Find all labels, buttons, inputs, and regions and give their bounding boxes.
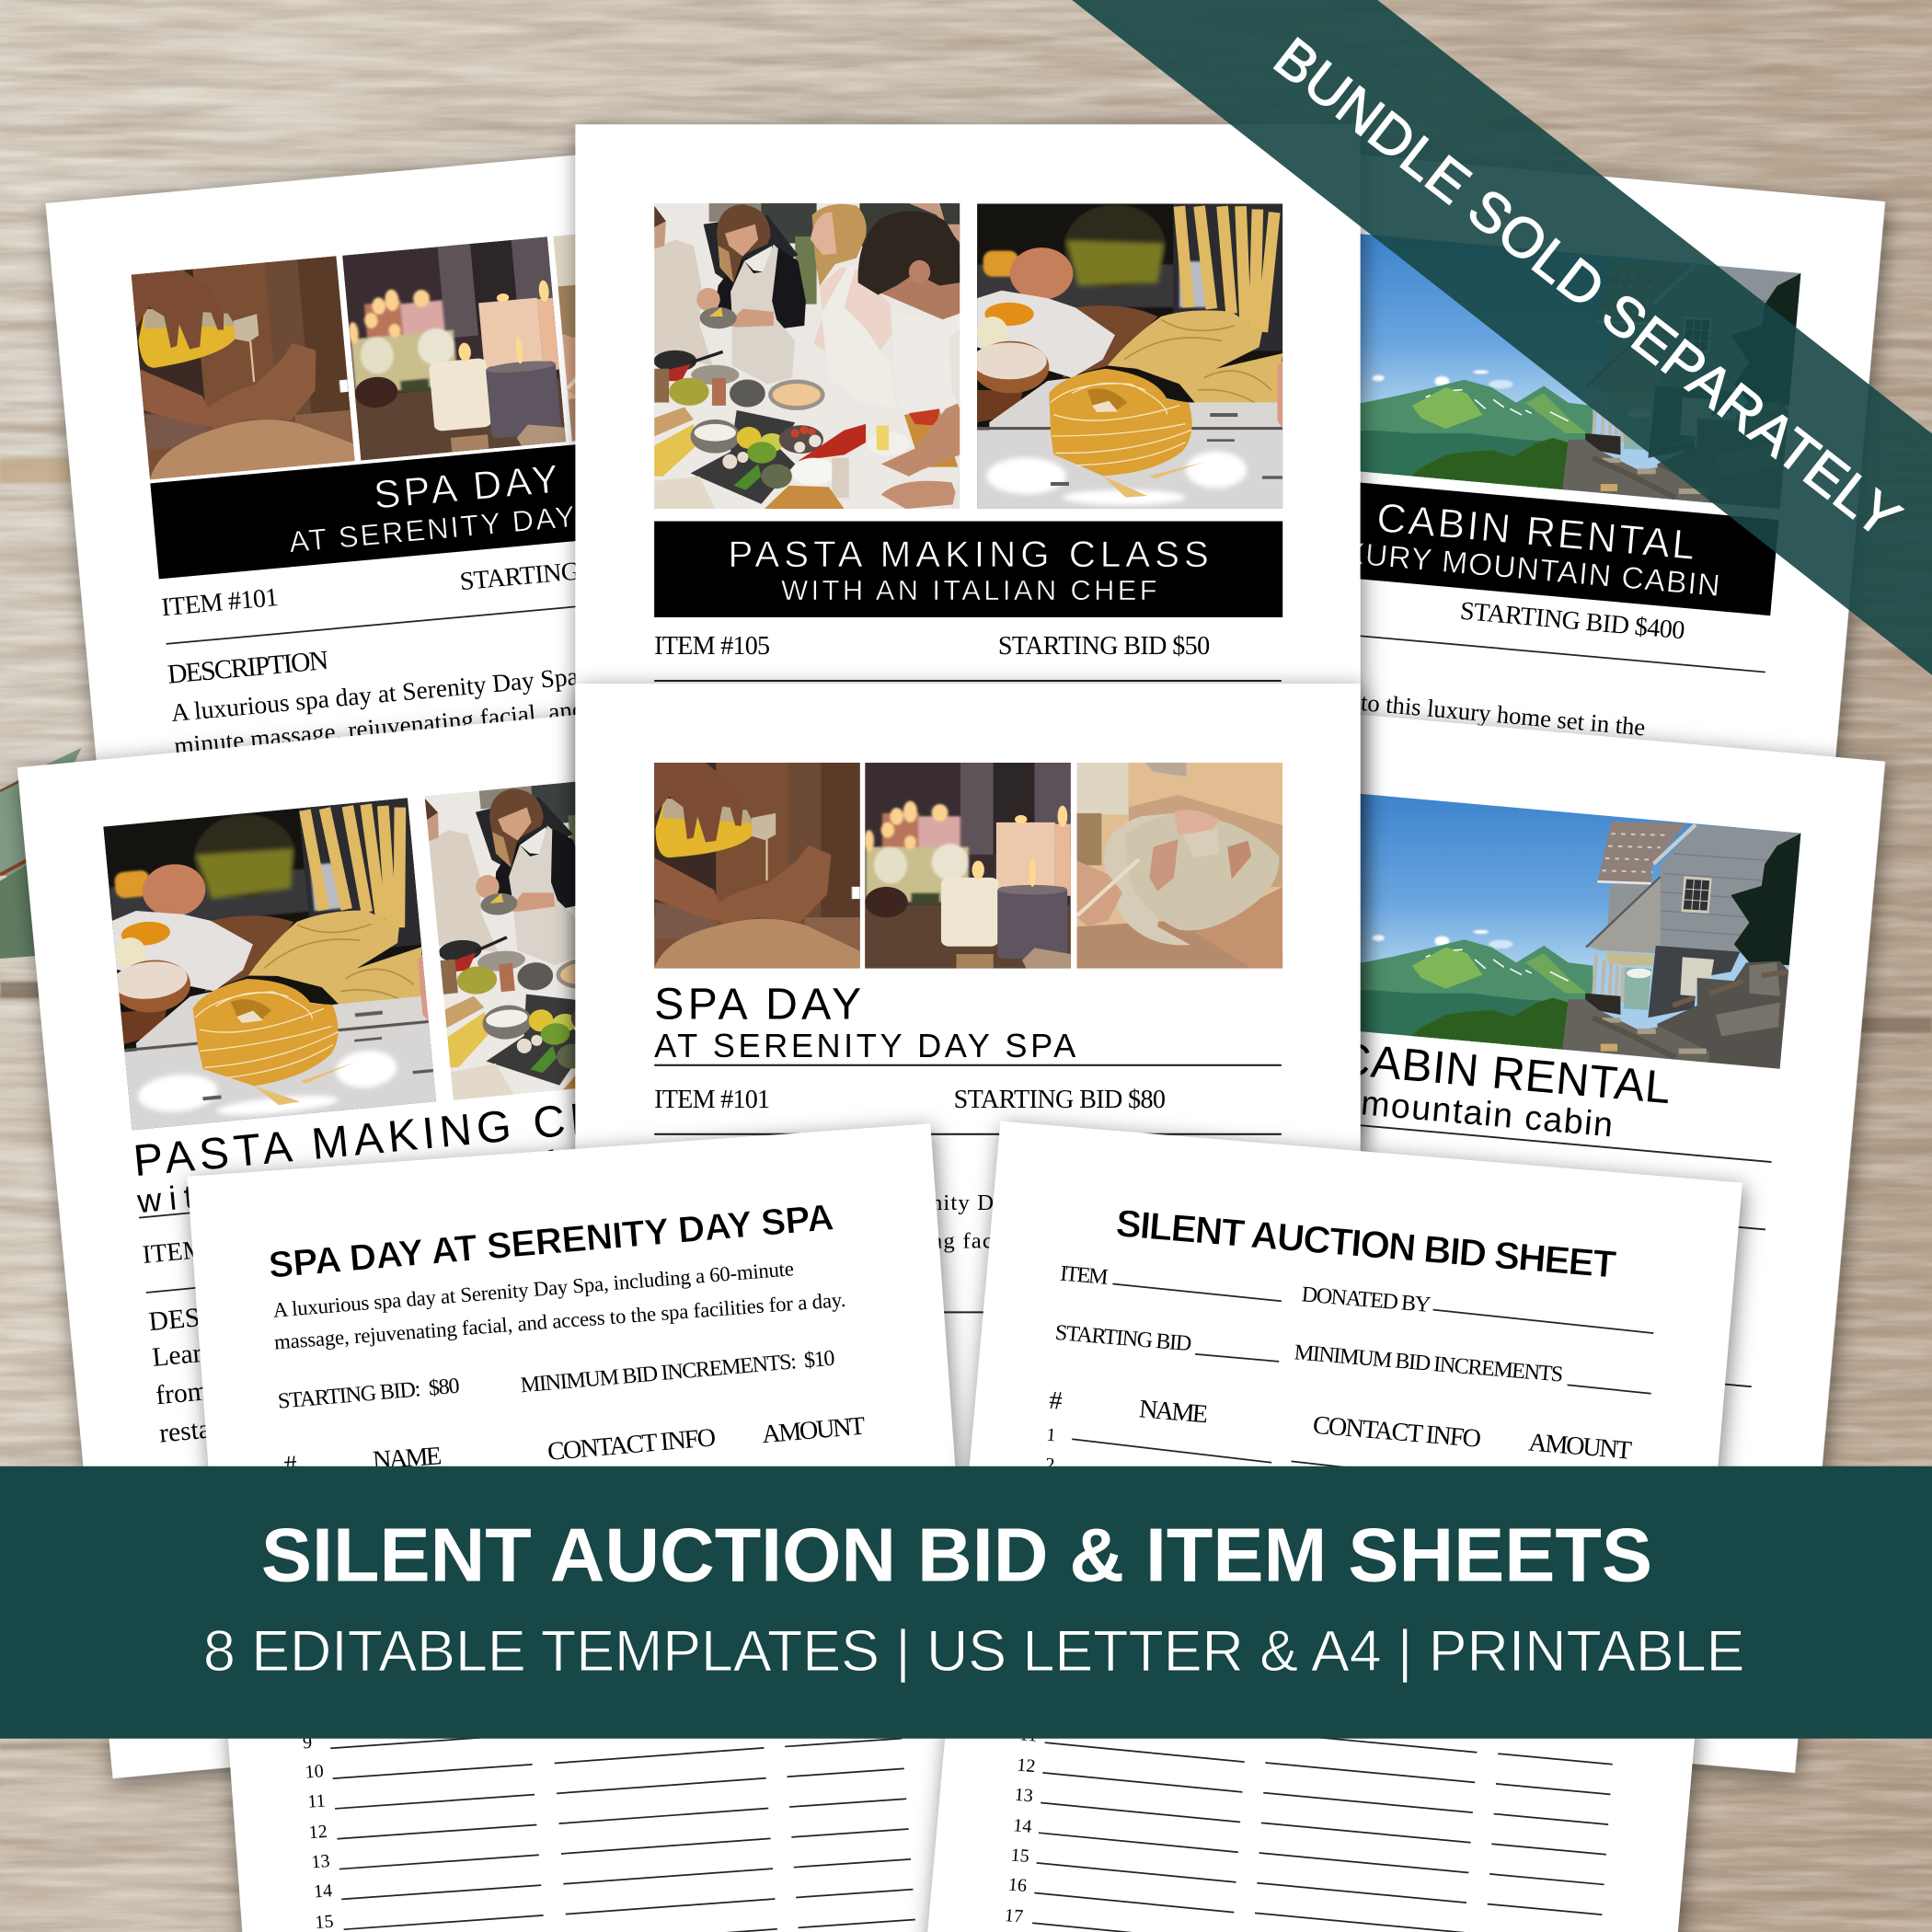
photo: pasta nest — [98, 798, 436, 1131]
title bar: PASTA MAKING CLASS — [729, 534, 1209, 575]
photo: facial — [1077, 763, 1282, 969]
signup rows: 2 — [1044, 1455, 1055, 1476]
subtitle: AT SERENITY DAY SPA — [654, 1027, 1076, 1064]
table headers: # — [283, 1451, 298, 1480]
title bar: CABIN RENTAL — [1375, 495, 1696, 569]
title: SPA DAY — [654, 980, 861, 1029]
main banner — [0, 1466, 1932, 1739]
item number: ITEM #105 — [142, 1230, 265, 1270]
corner ribbon — [1072, 0, 1932, 675]
signup rows: 10 — [305, 1761, 325, 1783]
photo: massage oil — [132, 256, 355, 479]
signup rows: 11 — [307, 1790, 326, 1812]
signup rows: 13 — [311, 1851, 330, 1872]
subtitle: with an italian chef — [134, 1144, 558, 1220]
item sheet: cabin rental, top right — [1013, 125, 1886, 1213]
description: Learn to make pasta — [151, 1323, 372, 1373]
signup rows: 14 — [1012, 1815, 1032, 1837]
signup rows: 17 — [1004, 1905, 1024, 1927]
form fields: DONATED BY — [1301, 1282, 1432, 1317]
title bar: WITH AN ITALIAN CHEF — [781, 574, 1157, 606]
table headers: NAME — [372, 1442, 443, 1475]
description — [654, 1190, 1169, 1254]
table headers: AMOUNT — [761, 1412, 867, 1449]
item number and starting bid: STARTING BID $80 — [458, 548, 673, 596]
signup rows: 16 — [1007, 1875, 1028, 1896]
photo: mountain cabin — [1073, 126, 1880, 655]
bid sheet title: SPA DAY AT SERENITY DAY SPA — [267, 1196, 835, 1286]
signup rows: 9 — [302, 1732, 313, 1753]
title bar: LUXURY MOUNTAIN CABIN — [1301, 533, 1721, 604]
description: A luxurious spa day at Serenity Day Spa, including — [654, 1190, 1169, 1215]
photo: candles — [864, 763, 1071, 969]
description: A luxurious spa day at Serenity Day Spa, including a 60- — [170, 648, 744, 727]
signup rows: 12 — [308, 1822, 328, 1843]
bid sheet: spa day — [188, 1123, 992, 1932]
subtitle: mountain cabin — [1360, 1083, 1615, 1144]
description: restaurant — [158, 1409, 268, 1449]
description: DESCRIPTION — [147, 1291, 326, 1337]
description: minute massage, rejuvenating facial, and — [654, 1229, 1069, 1254]
form fields: STARTING BID — [1054, 1321, 1192, 1356]
table headers: CONTACT INFO — [546, 1423, 717, 1466]
photo: mountain cabin — [1073, 685, 1880, 1214]
eucalyptus leaf — [0, 748, 81, 959]
bid sheet title: SILENT AUCTION BID SHEET — [1114, 1201, 1617, 1286]
table headers — [1048, 1386, 1633, 1466]
signup rows: 12 — [1016, 1755, 1036, 1777]
signup rows: 11 — [1018, 1724, 1038, 1746]
table headers: AMOUNT — [1527, 1428, 1633, 1466]
bid terms: MINIMUM BID INCREMENTS: $10 — [520, 1347, 836, 1397]
item number and starting bid — [654, 632, 1210, 661]
item number and starting bid: ITEM #101 — [654, 1086, 770, 1114]
form fields — [1054, 1262, 1564, 1387]
item number and starting bid: ITEM #105 — [654, 632, 770, 661]
banner title: SILENT AUCTION BID & ITEM SHEETS — [261, 1512, 1652, 1597]
title bar — [654, 522, 1282, 617]
item sheet: spa day, centre — [575, 684, 1361, 1699]
item number and starting bid: ITEM #101 — [160, 583, 280, 622]
table headers: # — [1048, 1386, 1064, 1416]
signup rows: 13 — [1014, 1785, 1034, 1806]
item sheet: pasta, lower left — [17, 694, 894, 1778]
item number and starting bid — [654, 1086, 1166, 1114]
table headers: NAME — [1138, 1395, 1209, 1429]
description — [147, 1287, 379, 1449]
table headers: CONTACT INFO — [1312, 1411, 1482, 1454]
starting bid: STARTING BID $400 — [1459, 597, 1686, 645]
description: DESCRIPTION — [167, 646, 329, 690]
item sheet: spa day, top left — [46, 132, 919, 1214]
signup rows: 15 — [1010, 1845, 1030, 1867]
title bar: SPA DAY — [372, 457, 560, 518]
item sheet: cabin rental, lower right — [1013, 684, 1886, 1773]
banner subtitle: 8 EDITABLE TEMPLATES | US LETTER & A4 | PRINTABLE — [203, 1619, 1744, 1684]
title bar: AT SERENITY DAY SPA — [288, 493, 650, 558]
signup rows — [302, 1708, 915, 1932]
signup rows — [1004, 1425, 1613, 1932]
description — [167, 608, 747, 760]
photo: cooking class — [424, 767, 757, 1100]
description: massage, rejuvenating facial, and access to the spa facilities for a day. — [273, 1288, 846, 1354]
ribbon text: BUNDLE SOLD SEPARATELY — [1263, 26, 1912, 550]
form fields: MINIMUM BID INCREMENTS — [1294, 1340, 1564, 1387]
title bar — [1144, 464, 1778, 615]
item number and starting bid: STARTING BID $80 — [954, 1086, 1166, 1114]
photo: massage oil — [654, 763, 860, 969]
description — [272, 1257, 846, 1354]
title bar — [150, 426, 785, 579]
signup rows: 1 — [1046, 1425, 1056, 1445]
description: Escape to this luxury home set in the — [1284, 682, 1647, 742]
photo: pasta nest — [972, 203, 1282, 509]
description: minute massage, rejuvenating facial, and access — [173, 689, 656, 760]
description: from scratch — [155, 1368, 293, 1410]
form fields: ITEM — [1059, 1262, 1110, 1290]
bid sheet: blank — [924, 1121, 1742, 1932]
signup rows: 14 — [313, 1880, 333, 1902]
title: CABIN RENTAL — [1336, 1032, 1673, 1113]
description: A luxurious spa day at Serenity Day Spa, including a 60-minute — [272, 1257, 795, 1322]
item sheet: pasta making class, centre — [575, 124, 1361, 1140]
photo: cooking class — [653, 203, 960, 509]
item number and starting bid — [160, 547, 673, 624]
table headers — [283, 1412, 867, 1480]
title: PASTA MAKING CLASS — [132, 1084, 700, 1186]
bid terms — [277, 1347, 836, 1414]
item number and starting bid: STARTING BID $50 — [998, 632, 1210, 661]
bid terms: STARTING BID: $80 — [277, 1374, 461, 1414]
